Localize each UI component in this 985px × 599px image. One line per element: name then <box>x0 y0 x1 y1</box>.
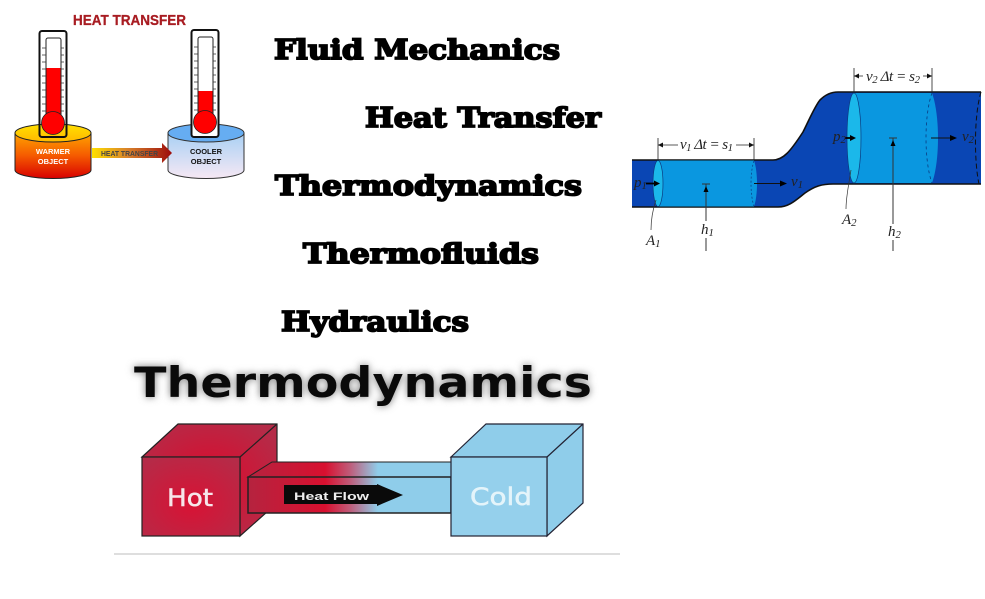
panel: thermodynamics hot and cold diagram <box>134 358 592 536</box>
diagram title: Thermodynamics <box>134 358 592 407</box>
pipe end dashed edge <box>975 92 981 184</box>
height h2: h <box>888 224 896 240</box>
height h1: 1 <box>708 227 714 239</box>
pipe walls <box>632 92 981 207</box>
hot cube: Hot <box>167 484 213 512</box>
pressure and velocity labels: 2 <box>969 134 975 146</box>
heading: Thermofluids: Thermofluids <box>303 239 539 270</box>
area label A1: 1 <box>655 238 661 250</box>
pressure and velocity labels: p <box>634 175 642 191</box>
measurement s1 <box>658 137 754 160</box>
pressure and velocity labels: 2 <box>840 134 846 146</box>
height h2: 2 <box>896 229 902 241</box>
diagram title shadow: Thermodynamics <box>134 358 592 407</box>
cooler object cylinder: OBJECT <box>191 157 222 166</box>
cooler object cylinder: COOLER <box>190 147 223 156</box>
measurement s1: 1 <box>728 142 733 154</box>
heat flow arrow <box>284 484 403 506</box>
pressure and velocity labels <box>633 129 975 192</box>
fluid segment 1 <box>653 160 757 206</box>
hot cube <box>142 424 277 536</box>
pipe body <box>632 92 981 207</box>
area label A2: 2 <box>851 217 857 229</box>
measurement s2 <box>854 68 932 92</box>
measurement s2: 2 <box>915 74 921 86</box>
warmer object cylinder: OBJECT <box>38 157 69 166</box>
heading: Heat Transfer: Heat Transfer <box>365 103 602 134</box>
panel: heat transfer diagram <box>15 12 244 178</box>
heading: Fluid Mechanics: Fluid Mechanics <box>274 35 560 66</box>
cold cube <box>451 424 583 536</box>
warmer object cylinder: WARMER <box>36 147 71 156</box>
measurement s2: v <box>866 69 873 85</box>
area label A2: A <box>842 212 851 228</box>
pressure and velocity labels: v <box>791 174 798 190</box>
measurement s2: Δt = s <box>877 69 915 85</box>
heat flow bar <box>248 462 451 513</box>
area label A1 <box>645 200 661 250</box>
cold cube: Cold <box>470 483 532 511</box>
cool thermometer <box>192 30 218 137</box>
pressure and velocity labels: v <box>962 129 969 145</box>
warm thermometer <box>40 31 66 137</box>
area label A1: A <box>646 233 655 249</box>
height h1 <box>701 184 714 251</box>
diagram title: HEAT TRANSFER <box>73 12 186 29</box>
heading: Hydraulics: Hydraulics <box>281 307 469 338</box>
height h1: h <box>701 222 708 238</box>
pressure and velocity labels: 1 <box>642 180 647 192</box>
height h2 <box>888 138 902 251</box>
pressure and velocity labels: p <box>833 129 840 145</box>
measurement s1: Δt = s <box>691 137 728 153</box>
measurement s1: v <box>680 137 687 153</box>
measurement s1: 1 <box>686 142 692 154</box>
heat transfer arrow: HEAT TRANSFER <box>101 151 158 158</box>
measurement s2: 2 <box>872 74 878 86</box>
area label A2 <box>841 170 857 229</box>
cooler object cylinder <box>168 124 244 178</box>
warmer object cylinder <box>15 124 91 178</box>
heading: Thermodynamics: Thermodynamics <box>275 171 582 202</box>
heat flow arrow: Heat Flow <box>294 491 370 503</box>
panel: Bernoulli pipe diagram <box>632 68 981 251</box>
heat transfer arrow <box>92 143 172 163</box>
pressure and velocity labels: 1 <box>798 179 803 191</box>
fluid segment 2 <box>847 93 938 183</box>
